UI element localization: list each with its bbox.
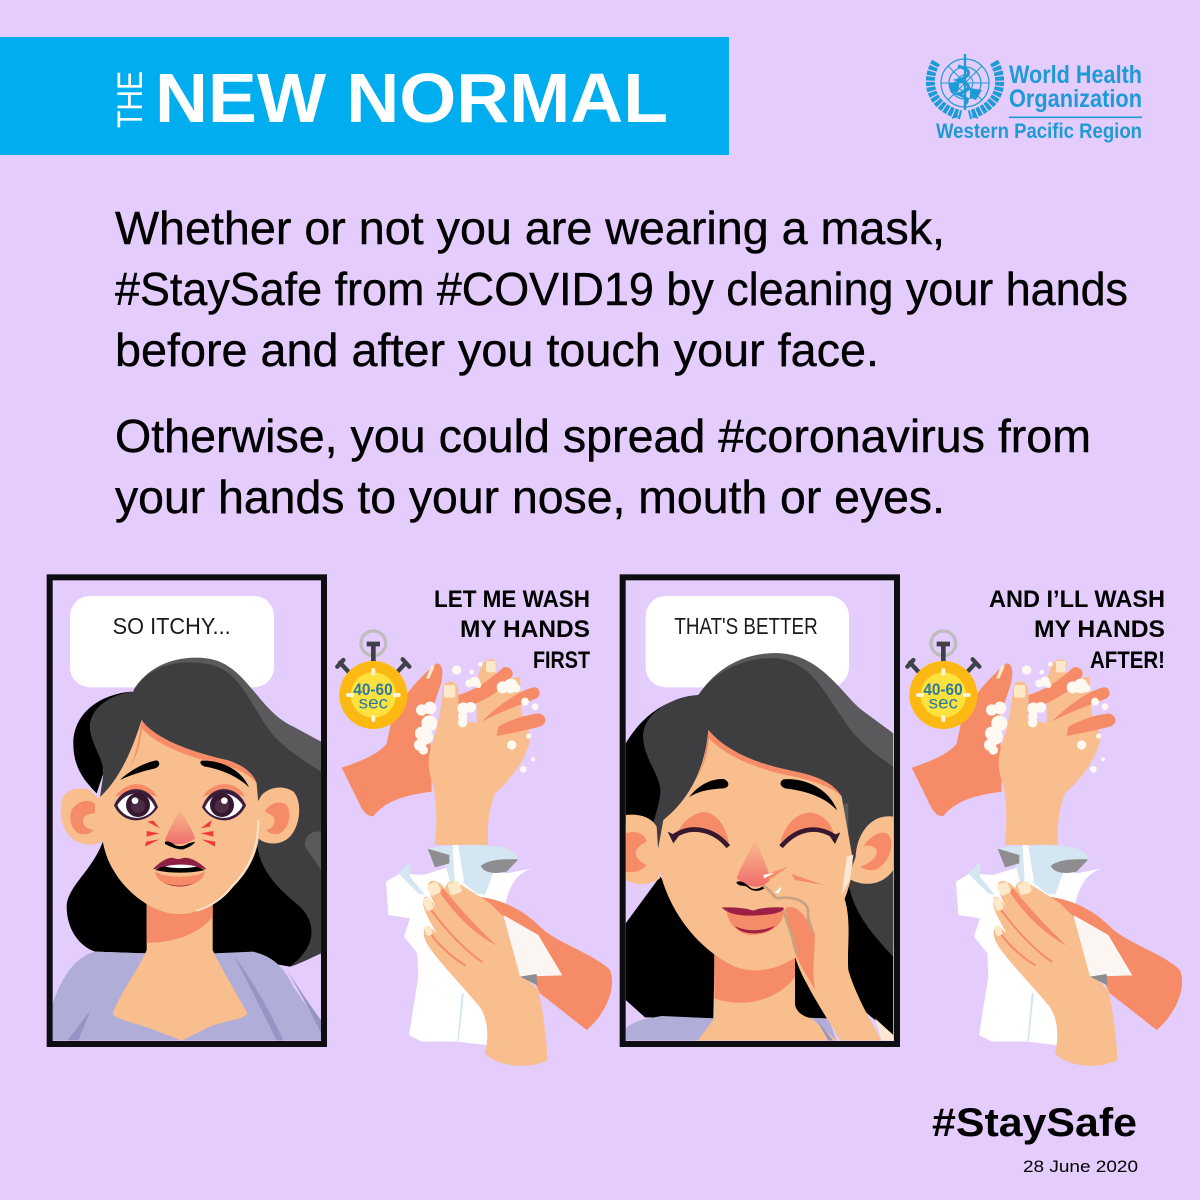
stopwatch: sec [929, 693, 958, 713]
hands [342, 659, 612, 1066]
woman: red nose [165, 808, 195, 844]
speech bubble [646, 596, 849, 687]
woman: shirt [626, 1016, 837, 1041]
body text block: Whether or not you are wearing a mask, [115, 202, 945, 254]
hands [912, 659, 1182, 1066]
caption: and i'll wash my hands after: MY HANDS [1034, 616, 1165, 643]
stopwatch [907, 631, 979, 729]
speech bubble [70, 596, 274, 687]
woman: eyebrows [689, 779, 837, 811]
bubble text: SO ITCHY... [113, 613, 231, 639]
panel: itchy nose [50, 577, 324, 1044]
date: 28 June 2020 [1023, 1157, 1138, 1176]
caption: and i'll wash my hands after: AFTER! [1090, 647, 1165, 674]
woman: face [97, 720, 260, 914]
caption: let me wash my hands first: MY HANDS [460, 616, 590, 643]
caption: let me wash my hands first: LET ME WASH [434, 586, 590, 613]
caption: let me wash my hands first: FIRST [533, 647, 590, 674]
hand washing illustration 2 [907, 631, 1182, 1066]
woman: hair [626, 653, 893, 1037]
woman: eye shadow [677, 812, 833, 843]
frame [50, 577, 324, 1044]
itch marks [145, 820, 215, 847]
panel: relieved [623, 577, 897, 1044]
WHO logo [930, 54, 1142, 143]
frame [623, 577, 897, 1044]
hashtag: #StaySafe [932, 1101, 1137, 1145]
woman: face [657, 730, 853, 970]
title: NEW NORMAL: NEW NORMAL [155, 59, 668, 137]
caption: and i'll wash my hands after: AND I’LL WASH [989, 586, 1165, 613]
icon: WHO emblem [930, 54, 1000, 118]
woman: eye shadow [115, 784, 245, 797]
woman: mouth [153, 858, 207, 887]
woman: hand touching nose [763, 855, 893, 1041]
logo text: Organization: Organization [1009, 85, 1142, 113]
title: THE: THE [111, 71, 150, 128]
woman: mouth [722, 907, 785, 935]
caption: and i'll wash my hands after [989, 586, 1165, 674]
stopwatch: 40-60 [923, 680, 963, 699]
bubble text: THAT'S BETTER [674, 613, 818, 639]
woman: neck [113, 903, 247, 1041]
caption: let me wash my hands first [434, 586, 590, 674]
body text block [115, 202, 1128, 523]
logo text: Western Pacific Region: Western Pacific Region [936, 120, 1142, 143]
woman: neck [698, 954, 836, 1040]
woman: eyebrows [120, 760, 249, 787]
woman: closed eyes [673, 830, 835, 847]
stopwatch [337, 631, 409, 729]
hand washing illustration 1 [337, 631, 612, 1066]
body text block: your hands to your nose, mouth or eyes. [115, 471, 945, 523]
logo text: World Health: World Health [1009, 61, 1142, 89]
woman: ears [61, 788, 103, 845]
body text block: #StaySafe from #COVID19 by cleaning your hands [115, 263, 1128, 315]
stopwatch: sec [359, 693, 388, 713]
title banner [0, 37, 729, 155]
woman: shirt [53, 952, 321, 1041]
woman: hair [67, 658, 321, 967]
body text block: before and after you touch your face. [115, 324, 879, 376]
body text block: Otherwise, you could spread #coronavirus from [115, 410, 1091, 462]
woman: eyes [114, 789, 246, 820]
woman: nose [737, 838, 770, 887]
woman: ears [626, 815, 660, 884]
stopwatch: 40-60 [353, 680, 393, 699]
